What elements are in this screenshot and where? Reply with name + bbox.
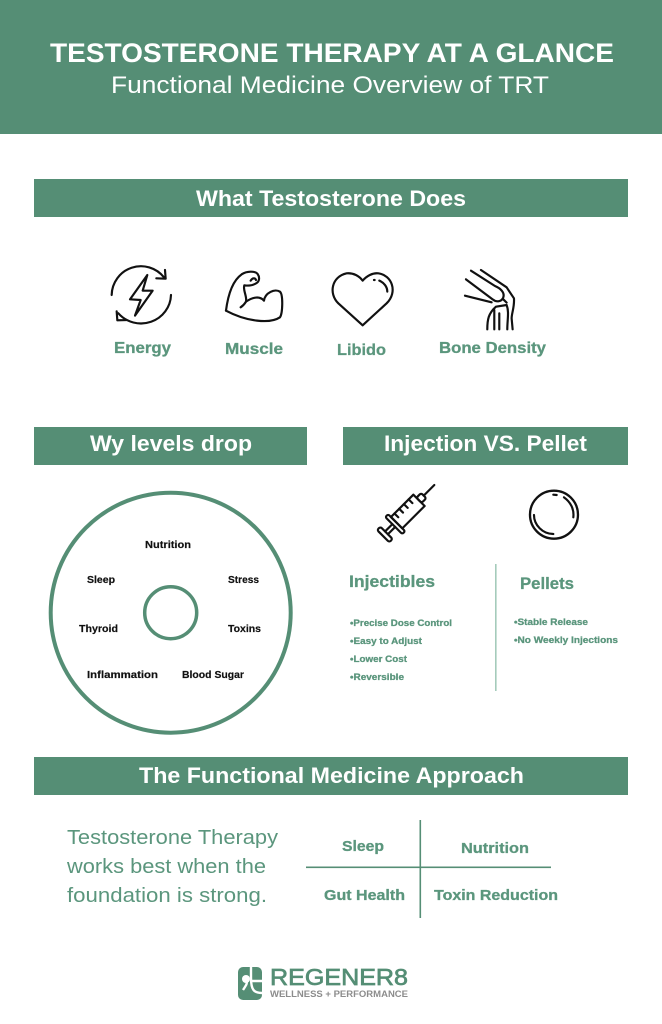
heading: The Functional Medicine Approach: The Functional Medicine Approach <box>139 763 524 788</box>
heading: Why levels drop <box>34 427 307 465</box>
icon: pellet <box>530 491 578 539</box>
text block: foundation statement: works best when the <box>66 856 266 878</box>
heading: The Functional Medicine Approach <box>34 757 628 795</box>
grid: functional medicine pillars <box>306 820 558 918</box>
icon: heart <box>333 273 393 325</box>
diagram: causes of low testosterone circle <box>51 493 291 733</box>
heading: Injection VS. Pellet <box>343 427 628 465</box>
heading: What Testosterone Does: What Testosterone Does <box>196 186 466 211</box>
label: Thyroid: Thyroid <box>79 623 118 635</box>
subtitle: Functional Medicine Overview of TRT <box>111 72 549 99</box>
icon: energy <box>112 266 171 323</box>
heading: Injection VS. Pellet: Injection VS. Pellet <box>384 431 588 456</box>
list: pellet benefits: •Stable Release <box>514 617 588 628</box>
label: Sleep: Sleep <box>87 574 115 586</box>
icon: knee joint <box>465 270 514 329</box>
label: Blood Sugar: Blood Sugar <box>182 669 244 681</box>
label: Nutrition: Nutrition <box>461 840 529 857</box>
label: Toxins: Toxins <box>228 623 261 635</box>
text block: foundation statement: Testosterone Therapy <box>67 827 278 849</box>
label: Muscle: Muscle <box>225 341 283 358</box>
tagline: WELLNESS + PERFORMANCE <box>270 989 408 999</box>
list: injectibles benefits: •Reversible <box>350 672 404 683</box>
wordmark: REGENER8 <box>270 964 408 990</box>
list: injectibles benefits: •Lower Cost <box>350 654 408 665</box>
label: Bone Density: Bone Density <box>439 340 546 357</box>
label: Toxin Reduction: Toxin Reduction <box>434 887 558 904</box>
heading: Pellets: Pellets <box>520 574 574 593</box>
heading: Why levels drop: Wy levels drop <box>90 431 252 456</box>
title: TESTOSTERONE THERAPY AT A GLANCE <box>50 38 614 68</box>
heading: What Testosterone Does <box>34 179 628 217</box>
icon: muscle <box>226 272 282 321</box>
label: Libido: Libido <box>337 342 386 359</box>
text block: foundation statement: foundation is strong. <box>67 885 267 907</box>
label: Inflammation: Inflammation <box>87 669 158 681</box>
label: Stress: Stress <box>228 574 259 586</box>
icon: syringe <box>375 477 443 545</box>
list: injectibles benefits: •Precise Dose Control <box>350 618 452 629</box>
icon: logo mark <box>238 967 262 1000</box>
logo: Regener8 <box>238 964 408 1000</box>
label: Nutrition: Nutrition <box>145 539 191 551</box>
label: Sleep: Sleep <box>342 838 384 855</box>
list: pellet benefits <box>514 617 618 646</box>
list: pellet benefits: •No Weekly Injections <box>514 635 618 646</box>
header banner <box>0 0 662 134</box>
list: injectibles benefits <box>350 618 452 683</box>
text block: foundation statement <box>66 827 278 907</box>
label: Energy: Energy <box>114 340 171 357</box>
heading: Injectibles: Injectibles <box>349 572 435 591</box>
label: Gut Health: Gut Health <box>324 887 405 904</box>
list: injectibles benefits: •Easy to Adjust <box>350 636 423 647</box>
